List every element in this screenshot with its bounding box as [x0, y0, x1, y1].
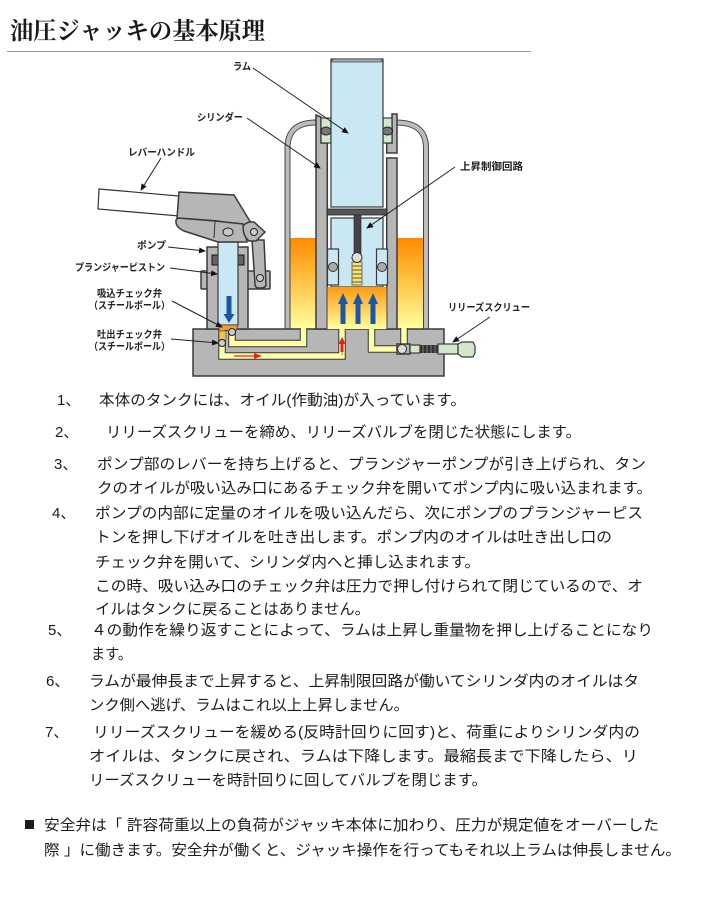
label: suction check valve — [89, 287, 222, 327]
label: pump — [137, 240, 205, 252]
label: cylinder — [197, 111, 320, 168]
step 4: チェック弁を開いて、シリンダ内へと挿し込まれます。 — [95, 554, 480, 571]
ram — [331, 59, 383, 207]
plunger piston — [218, 242, 238, 325]
step 4 — [52, 505, 643, 618]
step 3: 3、 — [54, 456, 77, 473]
step 6: ラムが最伸長まで上昇すると、上昇制限回路が働いてシリンダ内のオイルはタ — [89, 673, 639, 690]
label: release screw — [448, 301, 530, 342]
step 3: ポンプ部のレバーを持ち上げると、プランジャーポンプが引き上げられ、タン — [97, 456, 646, 473]
step 4: 4、 — [52, 505, 75, 522]
step 5: 5、 — [48, 622, 71, 639]
blue arrows: rising oil — [338, 293, 378, 324]
label: suction check valve: 吸込チェック弁 — [97, 287, 162, 300]
base block — [193, 329, 444, 376]
title: 油圧ジャッキの基本原理 — [10, 18, 265, 45]
label: ram: ラム — [233, 61, 251, 73]
step 6: ンク側へ逃げ、ラムはこれ以上上昇しません。 — [89, 697, 409, 714]
label: pump: ポンプ — [137, 240, 166, 252]
label: plunger piston: プランジャーピストン — [75, 262, 165, 274]
release screw — [397, 342, 475, 357]
check valves — [218, 325, 238, 346]
step 3: クのオイルが吸い込み口にあるチェック弁を開いてポンプ内に吸い込まれます。 — [97, 480, 652, 497]
ram flange — [327, 209, 387, 215]
step 5: ４の動作を繰り返すことによって、ラムは上昇し重量物を押し上げることになり — [91, 622, 653, 639]
oil chamber — [328, 287, 386, 329]
oil tanks — [288, 238, 426, 329]
label: discharge check valve — [89, 328, 218, 353]
lift control circuit — [328, 215, 388, 287]
label: lift control circuit: 上昇制御回路 — [460, 160, 523, 173]
label: plunger piston — [75, 262, 217, 274]
step 1: 本体のタンクには、オイル(作動油)が入っています。 — [99, 392, 466, 409]
step 4: ポンプの内部に定量のオイルを吸い込んだら、次にポンプのプランジャーピス — [95, 505, 643, 522]
diagram: hydraulic jack cross-section — [75, 59, 530, 376]
label: release screw: リリーズスクリュー — [448, 301, 530, 314]
step 7: リリーズスクリューを緩める(反時計回りに回す)と、荷重によりシリンダ内の — [93, 724, 640, 741]
cylinder walls — [316, 114, 397, 329]
label: discharge check valve: （スチールボール） — [89, 341, 170, 353]
step 7: リーズスクリューを時計回りに回してバルブを閉じます。 — [89, 771, 487, 789]
step 7: オイルは、タンクに戻され、ラムは下降します。最縮長まで下降したら、リ — [89, 748, 638, 765]
step 7: 7、 — [45, 724, 68, 741]
label: discharge check valve: 吐出チェック弁 — [97, 328, 162, 341]
lever handle — [98, 189, 179, 216]
oil channels — [222, 328, 404, 356]
blue arrow: plunger down — [224, 296, 234, 323]
ram seals — [321, 118, 392, 143]
red arrow: oil into cylinder — [338, 337, 346, 355]
outer tank casing — [288, 122, 426, 329]
safety valve note: 安全弁は「 許容荷重以上の負荷がジャッキ本体に加わり、圧力が規定値をオーバーした — [44, 817, 659, 834]
step 1: 1、 — [57, 392, 80, 409]
step 4: トンを押し下げオイルを吐き出します。ポンプ内のオイルは吐き出し口の — [95, 529, 612, 546]
safety valve note: 際 」に働きます。安全弁が働くと、ジャッキ操作を行ってもそれ以上ラムは伸長しません。 — [44, 842, 681, 859]
lever link — [243, 222, 266, 288]
label: cylinder: シリンダー — [197, 111, 243, 124]
safety valve note — [25, 817, 681, 859]
step 5: ます。 — [91, 646, 132, 663]
step 4: イルはタンクに戻ることはありません。 — [95, 601, 370, 618]
step 6: 6、 — [46, 673, 69, 690]
label: lever handle: レバーハンドル — [128, 147, 195, 159]
red arrow: channel flow — [234, 353, 262, 359]
step 3 — [54, 456, 652, 497]
pump body — [201, 247, 270, 329]
step 2: 2、 — [55, 424, 78, 441]
step 7 — [45, 724, 640, 789]
label: lever handle — [128, 147, 195, 190]
label: ram — [233, 61, 348, 133]
label: lift control circuit — [367, 160, 523, 228]
step 2: リリーズスクリューを締め、リリーズバルブを閉じた状態にします。 — [106, 423, 581, 441]
step 6 — [46, 673, 639, 714]
step 5 — [48, 622, 653, 663]
step 4: この時、吸い込み口のチェック弁は圧力で押し付けられて閉じているので、オ — [95, 578, 643, 595]
label: suction check valve: （スチールボール） — [89, 300, 170, 312]
lever head — [176, 192, 251, 242]
